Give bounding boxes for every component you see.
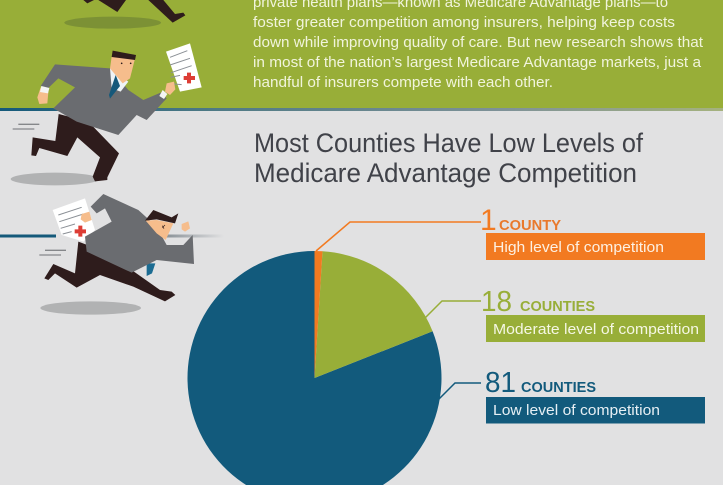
text block: intro paragraph bbox=[253, 0, 704, 91]
text block: intro paragraph: down while improving quality of care. But new research shows that bbox=[253, 34, 704, 51]
legend: moderate competition: COUNTIES bbox=[520, 299, 595, 315]
legend: high competition: COUNTY bbox=[499, 218, 561, 234]
heading: Medicare Advantage Competition bbox=[254, 158, 637, 188]
panel: green intro band bbox=[0, 0, 723, 109]
text block: intro paragraph: foster greater competition among insurers, helping keep costs bbox=[253, 14, 675, 31]
legend: high competition bbox=[480, 204, 705, 260]
legend: low competition: 81 bbox=[485, 367, 516, 399]
heading bbox=[254, 128, 643, 188]
legend: low competition: COUNTIES bbox=[521, 380, 596, 396]
legend: low competition bbox=[485, 367, 705, 424]
legend: high competition: 1 bbox=[480, 204, 497, 237]
illustration: lower running man with document bbox=[39, 194, 194, 315]
illustration: top man legs and shadow bbox=[64, 0, 185, 29]
legend: high competition: High level of competition bbox=[493, 239, 664, 256]
legend: moderate competition: Moderate level of competition bbox=[493, 321, 699, 338]
text block: intro paragraph: handful of insurers compete with each other. bbox=[253, 74, 553, 91]
text block: intro paragraph: in most of the nation’s largest Medicare Advantage markets, just a bbox=[253, 54, 702, 71]
pie chart: competition levels bbox=[187, 251, 441, 485]
legend: moderate competition: 18 bbox=[481, 286, 512, 318]
illustration: running man with document bbox=[11, 43, 202, 185]
leader lines bbox=[316, 222, 481, 400]
legend: moderate competition bbox=[481, 286, 705, 342]
heading: Most Counties Have Low Levels of bbox=[254, 128, 643, 158]
blue streak line behind running man bbox=[0, 234, 224, 238]
legend: low competition: Low level of competition bbox=[493, 402, 660, 419]
